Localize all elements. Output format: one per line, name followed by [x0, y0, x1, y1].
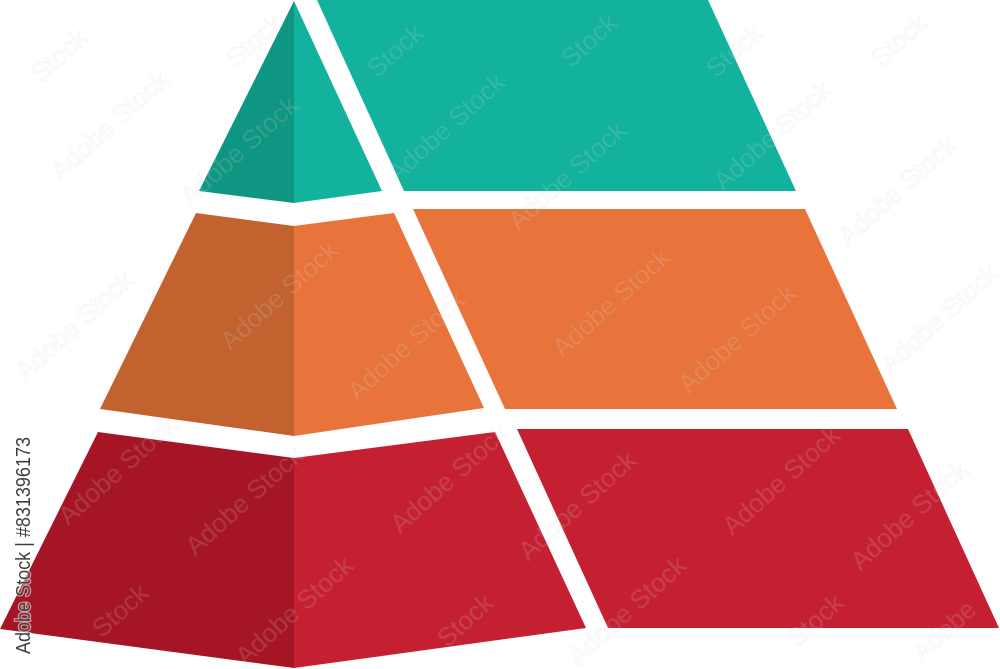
- watermark pattern: Adobe Stock: [844, 454, 975, 576]
- watermark id text: Adobe Stock | #831396173: [13, 437, 35, 654]
- watermark pattern: Stock: [700, 17, 769, 83]
- watermark pattern: Adobe Stock: [874, 257, 1000, 379]
- watermark pattern: Adobe Stock: [832, 129, 963, 251]
- watermark pattern: Stock: [25, 22, 94, 88]
- watermark pattern: Adobe Stock: [44, 64, 175, 186]
- watermark pattern: Adobe Stock: [672, 277, 803, 399]
- watermark pattern: Adobe Stock: [502, 114, 633, 236]
- pyramid: bottom tier red: [0, 432, 586, 668]
- watermark pattern: Adobe Stock: [716, 419, 847, 541]
- watermark pattern: Adobe Stock: [52, 409, 183, 531]
- watermark pattern: Stock: [555, 7, 624, 73]
- panel: teal label band: [317, 0, 796, 191]
- watermark pattern: Stock: [361, 17, 430, 83]
- watermark pattern: Adobe Stock: [214, 234, 345, 356]
- watermark pattern: Stock: [781, 587, 850, 653]
- watermark pattern: Adobe Stock: [179, 439, 310, 561]
- watermark pattern: Adobe Stock: [9, 264, 140, 386]
- watermark pattern: Adobe Stock: [229, 549, 360, 669]
- watermark pattern: Stock: [86, 577, 155, 643]
- watermark pattern: Adobe: [906, 594, 982, 667]
- watermark pattern: Adobe Stock: [384, 417, 515, 539]
- pyramid: middle tier orange: [100, 213, 484, 436]
- watermark pattern: Adobe Stock: [341, 284, 472, 406]
- watermark pattern: Stock: [220, 7, 289, 73]
- watermark pattern: Adobe Stock: [381, 66, 512, 188]
- watermark pattern: Adobe Stock: [546, 241, 677, 363]
- panel: red label band: [517, 429, 999, 628]
- watermark pattern: Stock: [865, 7, 934, 73]
- watermark pattern: Adobe Stock: [174, 89, 305, 211]
- watermark pattern: Stock: [431, 587, 500, 653]
- watermark pattern: Adobe Stock: [562, 549, 693, 669]
- pyramid: top tier teal: [199, 1, 382, 203]
- watermark pattern: Adobe Stock: [512, 444, 643, 566]
- watermark pattern: Adobe Stock: [707, 74, 838, 196]
- panel: orange label band: [413, 209, 897, 409]
